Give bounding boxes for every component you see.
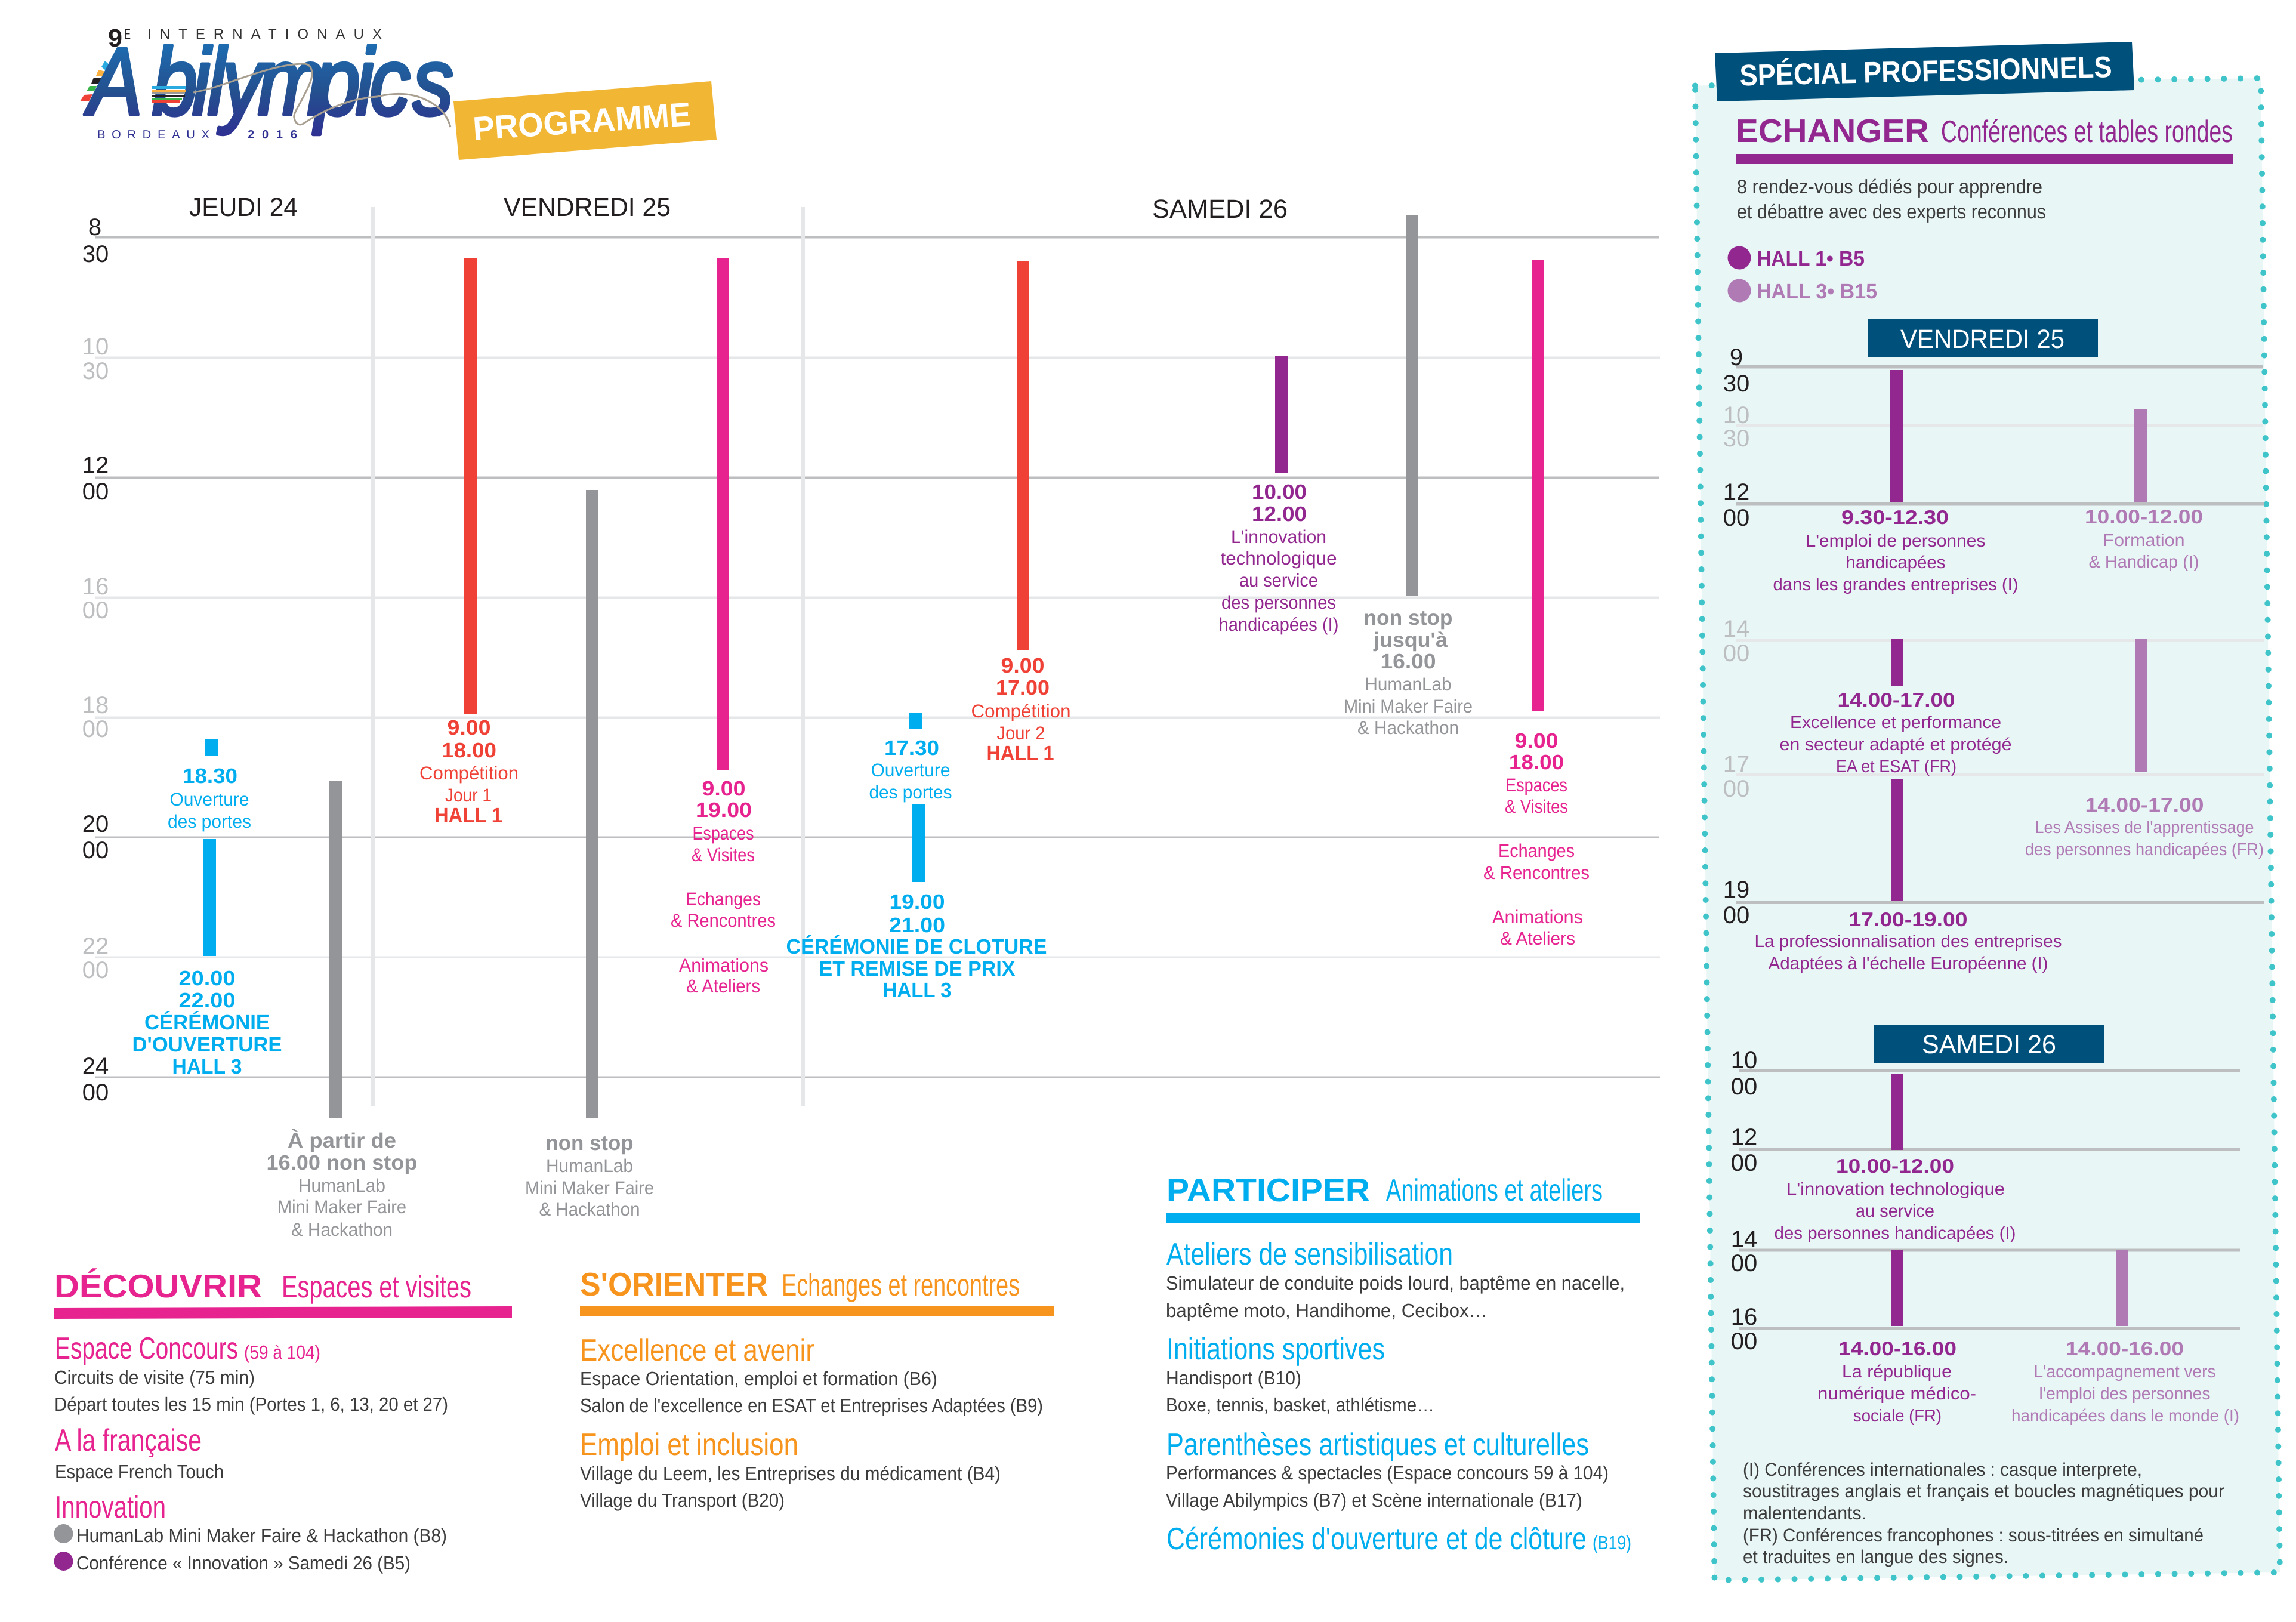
Friday: espaces et visites: & Ateliers [686,976,760,997]
session: Samedi 14.00-16.00 hall 1 [1817,1250,1976,1426]
time axis: Samedi: 16 [1731,1304,1757,1330]
Saturday: espaces et visites: Animations [1492,906,1583,927]
time axis labels: 24 [82,1053,109,1080]
time axis labels: 30 [82,241,109,267]
panel: S'orienter: Excellence et avenir [580,1333,814,1368]
session: 14.00-17.00 hall 3 [2025,639,2264,859]
Saturday: innovation technologique: 12.00 [1252,502,1307,526]
time axis: Vendredi: 30 [1723,371,1749,397]
session: Samedi 14.00-16.00 hall 3: l'emploi des personnes [2039,1384,2210,1404]
panel: Participer: baptême moto, Handihome, Cecibox… [1166,1300,1488,1321]
session: 14.00-17.00 hall 1: 14.00-17.00 [1838,689,1955,711]
footnote: (I) Conférences internationales : casque interprete, [1743,1459,2142,1480]
panel: S'orienter: Village du Transport (B20) [580,1490,785,1511]
Saturday: compétition jour 2: Jour 2 [996,723,1045,744]
session: Samedi 14.00-16.00 hall 1: La république [1842,1362,1952,1382]
Thursday: cérémonie d'ouverture: CÉRÉMONIE [144,1010,270,1034]
Thursday: HumanLab non stop: Mini Maker Faire [277,1197,406,1217]
Saturday: compétition jour 2: 9.00 [1001,654,1044,677]
session: 14.00-17.00 hall 3: Les Assises de l'apprentissage [2035,818,2254,837]
session: 17.00-19.00: La professionnalisation des entreprises [1754,932,2062,951]
footnote: et traduites en langue des signes. [1743,1546,2008,1567]
Friday: compétition jour 1: Jour 1 [445,785,492,806]
time axis: Samedi: 00 [1731,1250,1757,1276]
time axis labels: 30 [82,358,109,384]
session: 14.00-17.00 hall 1: en secteur adapté et protégé [1779,735,2012,754]
time axis labels: 22 [82,933,109,960]
session: Samedi 14.00-16.00 hall 3: 14.00-16.00 [2066,1337,2184,1359]
Saturday: espaces et visites: Echanges [1498,840,1575,861]
panel: Participer: Performances & spectacles (Espace concours 59 à 104) [1166,1462,1609,1484]
Thursday: cérémonie d'ouverture: HALL 3 [172,1055,242,1078]
Friday: HumanLab non stop [525,490,654,1220]
panel: S'orienter [580,1266,1054,1511]
session: Samedi 14.00-16.00 hall 1: 14.00-16.00 [1838,1337,1956,1359]
panel: Découvrir: Conférence « Innovation » Samedi 26 (B5) [76,1552,411,1574]
session: 9.30-12.30: L'emploi de personnes [1806,532,1986,551]
time axis labels: 16 [82,573,109,600]
Thursday: cérémonie d'ouverture: 22.00 [179,989,235,1012]
badge: PROGRAMME: PROGRAMME [472,95,692,147]
panel: Participer: Initiations sportives [1166,1332,1385,1367]
session: 9.30-12.30 [1773,370,2018,594]
Friday: compétition jour 1 [419,258,519,827]
session: Samedi 10.00-12.00: L'innovation technologique [1786,1180,2005,1199]
session: Samedi 14.00-16.00 hall 1: sociale (FR) [1853,1407,1942,1426]
Saturday: HumanLab non stop: jusqu'à [1373,628,1448,652]
panel: Participer: Ateliers de sensibilisation [1166,1237,1453,1272]
Friday: espaces et visites: & Rencontres [671,910,776,931]
session: 10.00-12.00: & Handicap (I) [2088,553,2199,572]
Saturday: cérémonie de cloture: HALL 3 [883,979,951,1002]
Friday: espaces et visites: 9.00 [702,777,746,800]
time axis labels: 00 [82,716,109,742]
time axis: Vendredi: 00 [1723,902,1749,929]
time axis: Vendredi: 00 [1723,505,1749,531]
time axis labels: 20 [82,811,109,837]
Saturday: cérémonie de cloture: ET REMISE DE PRIX [819,957,1016,980]
Thursday: ouverture des portes: des portes [168,811,251,832]
Saturday: HumanLab non stop [1344,215,1473,738]
Thursday: cérémonie d'ouverture: D'OUVERTURE [132,1033,282,1056]
logo: Abilympics Bordeaux 2016: 2016 [248,128,297,141]
Saturday: cérémonie de cloture [786,804,1047,1002]
panel: Participer: Cérémonies d'ouverture et de clôture [1166,1522,1587,1556]
time axis: Vendredi [1723,344,1749,929]
Saturday: compétition jour 2: Compétition [971,701,1070,721]
panel: Découvrir: Espace French Touch [55,1461,224,1482]
day banner: Vendredi 25 [1868,319,2098,357]
time axis labels: 00 [82,597,109,624]
Saturday: HumanLab non stop: non stop [1364,606,1452,630]
intro text [1737,175,2046,223]
Saturday: cérémonie de cloture: 21.00 [889,914,945,937]
Friday: espaces et visites: Echanges [686,889,761,909]
Thursday: cérémonie d'ouverture [132,839,282,1078]
Saturday: HumanLab non stop: 16.00 [1381,650,1436,673]
time axis labels: 00 [82,479,109,505]
logo: Abilympics Bordeaux 2016: 9 [108,24,122,52]
Thursday: HumanLab non stop [266,781,418,1240]
Saturday: espaces et visites: & Visites [1505,796,1568,817]
time axis: Vendredi: 00 [1723,776,1749,802]
Saturday: innovation technologique: L'innovation [1231,526,1326,547]
Saturday: HumanLab non stop: HumanLab [1365,674,1451,695]
time axis labels [82,214,109,1106]
session: 9.30-12.30: dans les grandes entreprises (I) [1773,575,2018,594]
session: Samedi 14.00-16.00 hall 1: numérique médico- [1817,1384,1976,1404]
Friday: compétition jour 1: Compétition [419,763,519,784]
Saturday: innovation technologique: 10.00 [1252,480,1307,504]
Friday: compétition jour 1: HALL 1 [434,804,502,827]
Saturday: cérémonie de cloture: CÉRÉMONIE DE CLOTURE [786,935,1047,958]
time axis: Samedi [1731,1047,1757,1355]
day banner: Vendredi 25: VENDREDI 25 [1900,325,2064,354]
panel: Participer: Parenthèses artistiques et culturelles [1166,1427,1589,1462]
time axis labels: 18 [82,692,109,719]
panel: Participer [1166,1171,1640,1556]
footnote: (FR) Conférences francophones : sous-titrées en simultané [1743,1525,2204,1546]
panel: Participer: (B19) [1593,1532,1631,1553]
Friday: espaces et visites: Animations [679,955,769,976]
panel: Participer: Boxe, tennis, basket, athlétisme… [1166,1394,1434,1416]
session: Samedi 14.00-16.00 hall 3 [2011,1250,2239,1426]
chart grid lines [95,207,1660,1106]
time axis: Samedi: 00 [1731,1074,1757,1100]
session: Samedi 14.00-16.00 hall 3: L'accompagnement vers [2033,1362,2216,1382]
session: 9.30-12.30: handicapées [1846,553,1945,572]
panel: Participer: Animations et ateliers [1386,1173,1603,1208]
time axis: Vendredi: 19 [1723,877,1749,903]
Thursday: ouverture des portes: Ouverture [169,789,249,810]
Saturday: ouverture des portes: 17.30 [884,736,939,760]
Saturday: innovation technologique [1218,356,1339,635]
footnote: malentendants. [1743,1503,1866,1524]
Saturday: espaces et visites: & Ateliers [1500,928,1575,949]
panel: Découvrir: Espaces et visites [282,1270,471,1305]
heading: Echanger [1736,112,2233,164]
panel: S'orienter: S'ORIENTER [580,1266,768,1303]
panel: S'orienter: Espace Orientation, emploi et formation (B6) [580,1368,937,1389]
panel: Découvrir: Circuits de visite (75 min) [54,1367,255,1388]
Thursday: ouverture des portes: 18.30 [183,764,237,788]
Saturday: compétition jour 2 [971,261,1070,765]
session: 10.00-12.00: 10.00-12.00 [2085,505,2203,528]
panel: Découvrir: Espace Concours [55,1331,238,1366]
panel: Découvrir [54,1268,512,1574]
Saturday: compétition jour 2: HALL 1 [987,742,1054,765]
Friday: compétition jour 1: 9.00 [448,716,490,739]
time axis: Vendredi: 00 [1723,640,1749,667]
time axis: Vendredi: 12 [1723,479,1749,505]
Thursday: cérémonie d'ouverture: 20.00 [179,967,235,990]
panel: Découvrir: (59 à 104) [244,1342,320,1363]
footnote: soustitrages anglais et français et boucles magnétiques pour [1743,1481,2224,1501]
Thursday: HumanLab non stop: 16.00 non stop [266,1151,418,1174]
panel: Découvrir: HumanLab Mini Maker Faire & Hackathon (B8) [76,1525,447,1546]
time axis: Vendredi: 14 [1723,616,1749,642]
logo: Abilympics Bordeaux 2016: INTERNATIONAUX [147,26,382,42]
panel: S'orienter: Emploi et inclusion [580,1427,798,1462]
Saturday: espaces et visites: 9.00 [1514,729,1559,753]
session: 14.00-17.00 hall 3: 14.00-17.00 [2085,794,2204,816]
session: 9.30-12.30: 9.30-12.30 [1841,506,1949,528]
day banner: Samedi 26: SAMEDI 26 [1922,1030,2056,1059]
session: Samedi 10.00-12.00: au service [1856,1202,1934,1221]
Saturday: ouverture des portes: Ouverture [871,760,950,781]
logo: Abilympics Bordeaux 2016: BORDEAUX [97,128,209,141]
session: 14.00-17.00 hall 1: Excellence et performance [1790,713,2001,732]
Saturday: innovation technologique: au service [1239,570,1318,591]
Saturday: espaces et visites: 18.00 [1509,751,1564,774]
Friday: espaces et visites [671,258,776,997]
Saturday: espaces et visites: & Rencontres [1483,862,1590,883]
panel: Participer: Simulateur de conduite poids lourd, baptême en nacelle, [1166,1272,1625,1294]
Saturday: ouverture des portes: des portes [869,782,952,803]
Friday: HumanLab non stop: non stop [545,1131,634,1155]
legend: halls: HALL 1• B5 [1757,247,1865,270]
banner: Spécial professionnels [1715,42,2134,101]
session: 17.00-19.00: Adaptées à l'échelle Européenne (I) [1769,954,2048,973]
day headings: SAMEDI 26 [1152,195,1288,224]
session: Samedi 10.00-12.00: des personnes handicapées (I) [1775,1224,2016,1243]
session: 14.00-17.00 hall 3: des personnes handicapées (FR) [2025,840,2264,859]
banner: Spécial professionnels: SPÉCIAL PROFESSIONNELS [1739,50,2112,92]
Saturday: cérémonie de cloture: 19.00 [889,890,945,914]
time axis labels: 00 [82,837,109,864]
panel: Découvrir: A la française [55,1423,202,1458]
logo: Abilympics Bordeaux 2016: Abilympics [84,28,453,135]
Friday: HumanLab non stop: HumanLab [546,1155,633,1176]
time axis labels: 12 [82,452,109,479]
session: 14.00-17.00 hall 1 [1779,639,2012,776]
Saturday: HumanLab non stop: Mini Maker Faire [1344,696,1473,717]
day headings: VENDREDI 25 [504,193,671,222]
chart grid: Samedi [1739,1069,2240,1330]
time axis: Samedi: 00 [1731,1150,1757,1176]
session: Samedi 10.00-12.00: 10.00-12.00 [1836,1155,1954,1177]
session: 14.00-17.00 hall 1: EA et ESAT (FR) [1836,757,1956,776]
Friday: compétition jour 1: 18.00 [442,739,496,762]
panel: Participer: Handisport (B10) [1166,1367,1301,1389]
Friday: espaces et visites: 19.00 [696,798,752,822]
panel: Spécial professionnels [1695,42,2280,1580]
Thursday: HumanLab non stop: & Hackathon [291,1219,393,1240]
Friday: espaces et visites: & Visites [692,844,755,865]
Thursday: ouverture des portes [168,739,251,832]
time axis labels: 8 [88,214,101,240]
Thursday: HumanLab non stop: À partir de [288,1128,396,1152]
panel: Découvrir: Départ toutes les 15 min (Portes 1, 6, 13, 20 et 27) [54,1393,448,1415]
Saturday: HumanLab non stop: & Hackathon [1357,717,1459,738]
Friday: HumanLab non stop: & Hackathon [539,1199,640,1220]
session: 17.00-19.00 [1754,779,2062,973]
badge: PROGRAMME [453,81,717,160]
time axis: Vendredi: 9 [1730,344,1743,371]
legend: halls: HALL 3• B15 [1757,280,1877,303]
Saturday: espaces et visites: Espaces [1505,775,1567,795]
chart grid: Vendredi [1736,365,2264,904]
session: 17.00-19.00: 17.00-19.00 [1848,908,1968,930]
session: 10.00-12.00: Formation [2103,531,2185,550]
Saturday: innovation technologique: handicapées (I) [1218,614,1339,635]
time axis: Samedi: 10 [1731,1047,1757,1074]
Saturday: espaces et visites [1483,260,1590,949]
Friday: espaces et visites: Espaces [692,823,754,844]
Saturday: ouverture des portes [869,713,952,803]
footnote [1743,1459,2224,1567]
panel: Participer: PARTICIPER [1166,1171,1370,1208]
Saturday: compétition jour 2: 17.00 [996,676,1050,699]
time axis: Samedi: 12 [1731,1124,1757,1151]
session: 10.00-12.00 [2085,409,2203,572]
logo: Abilympics Bordeaux 2016: E [124,26,131,42]
time axis: Vendredi: 30 [1723,425,1749,452]
Saturday: innovation technologique: des personnes [1221,592,1336,613]
time axis labels: 00 [82,1080,109,1106]
Thursday: HumanLab non stop: HumanLab [298,1175,385,1196]
session: Samedi 10.00-12.00 [1775,1074,2016,1243]
session: Samedi 14.00-16.00 hall 3: handicapées dans le monde (I) [2011,1407,2239,1426]
day headings: JEUDI 24 [189,193,298,222]
time axis: Samedi: 00 [1731,1328,1757,1355]
time axis: Vendredi: 17 [1723,751,1749,778]
day headings [189,193,1288,224]
panel: Participer: Village Abilympics (B7) et Scène internationale (B17) [1166,1490,1582,1511]
Saturday: innovation technologique: technologique [1221,548,1337,569]
heading: Echanger: ECHANGER [1736,112,1929,149]
panel: Découvrir: Innovation [55,1490,166,1525]
legend: halls [1728,246,1877,303]
time axis labels: 10 [82,334,109,360]
intro text: et débattre avec des experts reconnus [1737,201,2046,223]
time axis labels: 00 [82,957,109,983]
day banner: Samedi 26 [1874,1025,2104,1063]
panel: S'orienter: Village du Leem, les Entreprises du médicament (B4) [580,1463,1001,1484]
panel: Découvrir: DÉCOUVRIR [54,1268,262,1305]
time axis: Vendredi: 10 [1723,402,1749,428]
panel: S'orienter: Salon de l'excellence en ESAT et Entreprises Adaptées (B9) [580,1395,1043,1416]
intro text: 8 rendez-vous dédiés pour apprendre [1737,175,2042,198]
Friday: HumanLab non stop: Mini Maker Faire [525,1177,654,1198]
panel: S'orienter: Echanges et rencontres [782,1268,1020,1303]
time axis: Samedi: 14 [1731,1226,1757,1253]
